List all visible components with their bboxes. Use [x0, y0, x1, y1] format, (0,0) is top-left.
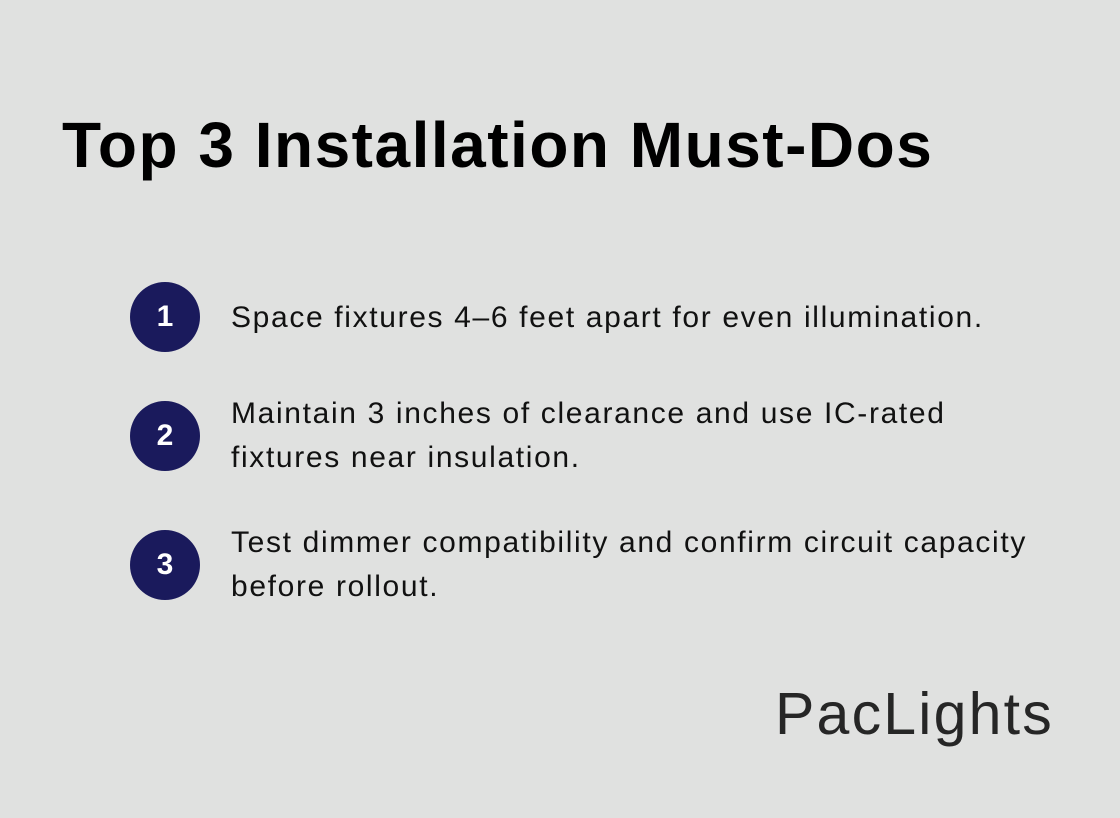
badge 2: 2 — [157, 419, 173, 452]
item 3 — [130, 526, 1027, 603]
text 3: before rollout. — [231, 570, 439, 603]
text 2: fixtures near insulation. — [231, 441, 581, 474]
text 3 — [231, 526, 1027, 603]
badge 1: 1 — [157, 300, 173, 333]
item 2 — [130, 397, 946, 474]
badge 2 — [130, 401, 200, 471]
title: Top 3 Installation Must-Dos — [62, 109, 933, 181]
item 1 — [130, 282, 984, 352]
text 1: Space fixtures 4–6 feet apart for even illumination. — [231, 301, 984, 334]
text 3: Test dimmer compatibility and confirm circuit capacity — [231, 526, 1027, 559]
text 2: Maintain 3 inches of clearance and use IC-rated — [231, 397, 946, 430]
badge 3: 3 — [157, 548, 173, 581]
badge 3 — [130, 530, 200, 600]
logo: PacLights — [775, 681, 1054, 747]
badge 1 — [130, 282, 200, 352]
text 2 — [231, 397, 946, 474]
